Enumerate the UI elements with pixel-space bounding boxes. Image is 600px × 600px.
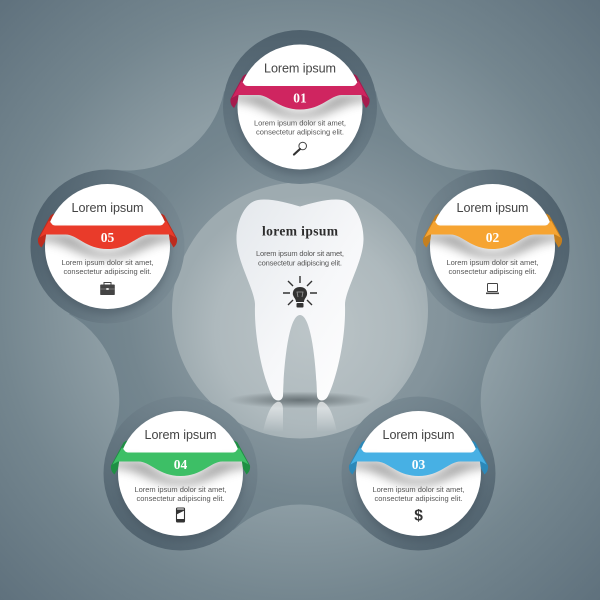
icon: briefcase	[100, 282, 115, 295]
text	[62, 258, 154, 276]
text: Lorem ipsum dolor sit amet,	[372, 485, 464, 494]
panel: 01	[223, 30, 377, 184]
text: Lorem ipsum dolor sit amet,	[134, 485, 226, 494]
ribbon	[40, 220, 176, 249]
tooth group	[228, 200, 372, 432]
ribbon tails	[423, 214, 562, 248]
text	[134, 485, 226, 503]
ribbon shadow	[230, 94, 370, 119]
panel: 03	[342, 396, 496, 550]
number: 02	[486, 230, 500, 245]
text: Lorem ipsum dolor sit amet,	[254, 118, 346, 127]
ribbon shadow	[38, 234, 178, 258]
white disc	[118, 411, 243, 536]
title: Lorem ipsum	[264, 62, 336, 76]
tooth text	[256, 249, 344, 267]
number: 04	[174, 457, 188, 472]
number: 03	[412, 457, 426, 472]
white disc	[356, 411, 481, 536]
title: Lorem ipsum	[382, 428, 454, 442]
pentagon blob	[69, 91, 531, 530]
text	[372, 485, 464, 503]
panel: 04	[104, 396, 258, 550]
ring	[104, 396, 258, 550]
icon: phone	[176, 508, 184, 522]
ribbon	[112, 448, 248, 476]
tooth heading: lorem ipsum	[262, 224, 339, 239]
text: consectetur adipiscing elit.	[136, 494, 224, 503]
central circle	[172, 182, 428, 438]
ring	[342, 396, 496, 550]
title: Lorem ipsum	[456, 201, 528, 215]
tooth shape	[236, 200, 364, 400]
icon: dollar: $	[414, 508, 423, 524]
disc shadow	[430, 188, 556, 314]
text: consectetur adipiscing elit.	[374, 494, 462, 503]
disc shadow	[44, 188, 170, 314]
tooth ground shadow	[228, 392, 372, 408]
text: Lorem ipsum dolor sit amet,	[62, 258, 154, 267]
text	[446, 258, 538, 276]
panel: 02	[416, 170, 570, 324]
disc shadow	[237, 49, 363, 175]
disc shadow	[356, 416, 482, 542]
ribbon tails	[349, 440, 488, 474]
disc shadow	[118, 416, 244, 542]
icon: laptop	[486, 284, 499, 294]
text: consectetur adipiscing elit.	[64, 267, 152, 276]
icon: light bulb	[283, 276, 317, 308]
ribbon tails	[38, 214, 177, 248]
number: 01	[293, 90, 307, 105]
title: Lorem ipsum	[72, 201, 144, 215]
ribbon	[424, 220, 560, 249]
text	[254, 118, 346, 137]
ribbon tails	[111, 440, 250, 474]
panel: 05	[30, 170, 184, 324]
ribbon	[350, 448, 486, 476]
ring	[30, 170, 184, 324]
number: 05	[101, 230, 114, 245]
tooth text: consectetur adipiscing elit.	[258, 258, 342, 267]
ring	[416, 170, 570, 324]
text: Lorem ipsum dolor sit amet,	[446, 258, 538, 267]
ring	[223, 30, 377, 184]
tooth text: Lorem ipsum dolor sit amet,	[256, 249, 344, 258]
ribbon	[232, 81, 368, 110]
ribbon shadow	[422, 234, 562, 258]
icon: magnifier	[294, 142, 306, 154]
ribbon shadow	[348, 460, 488, 486]
white disc	[430, 184, 555, 309]
ribbon tails	[230, 74, 370, 108]
tooth reflection	[263, 402, 337, 432]
text: consectetur adipiscing elit.	[256, 128, 344, 137]
white disc	[238, 44, 362, 170]
ribbon shadow	[110, 460, 250, 486]
title: Lorem ipsum	[144, 428, 216, 442]
text: consectetur adipiscing elit.	[448, 267, 536, 276]
white disc	[45, 184, 170, 309]
